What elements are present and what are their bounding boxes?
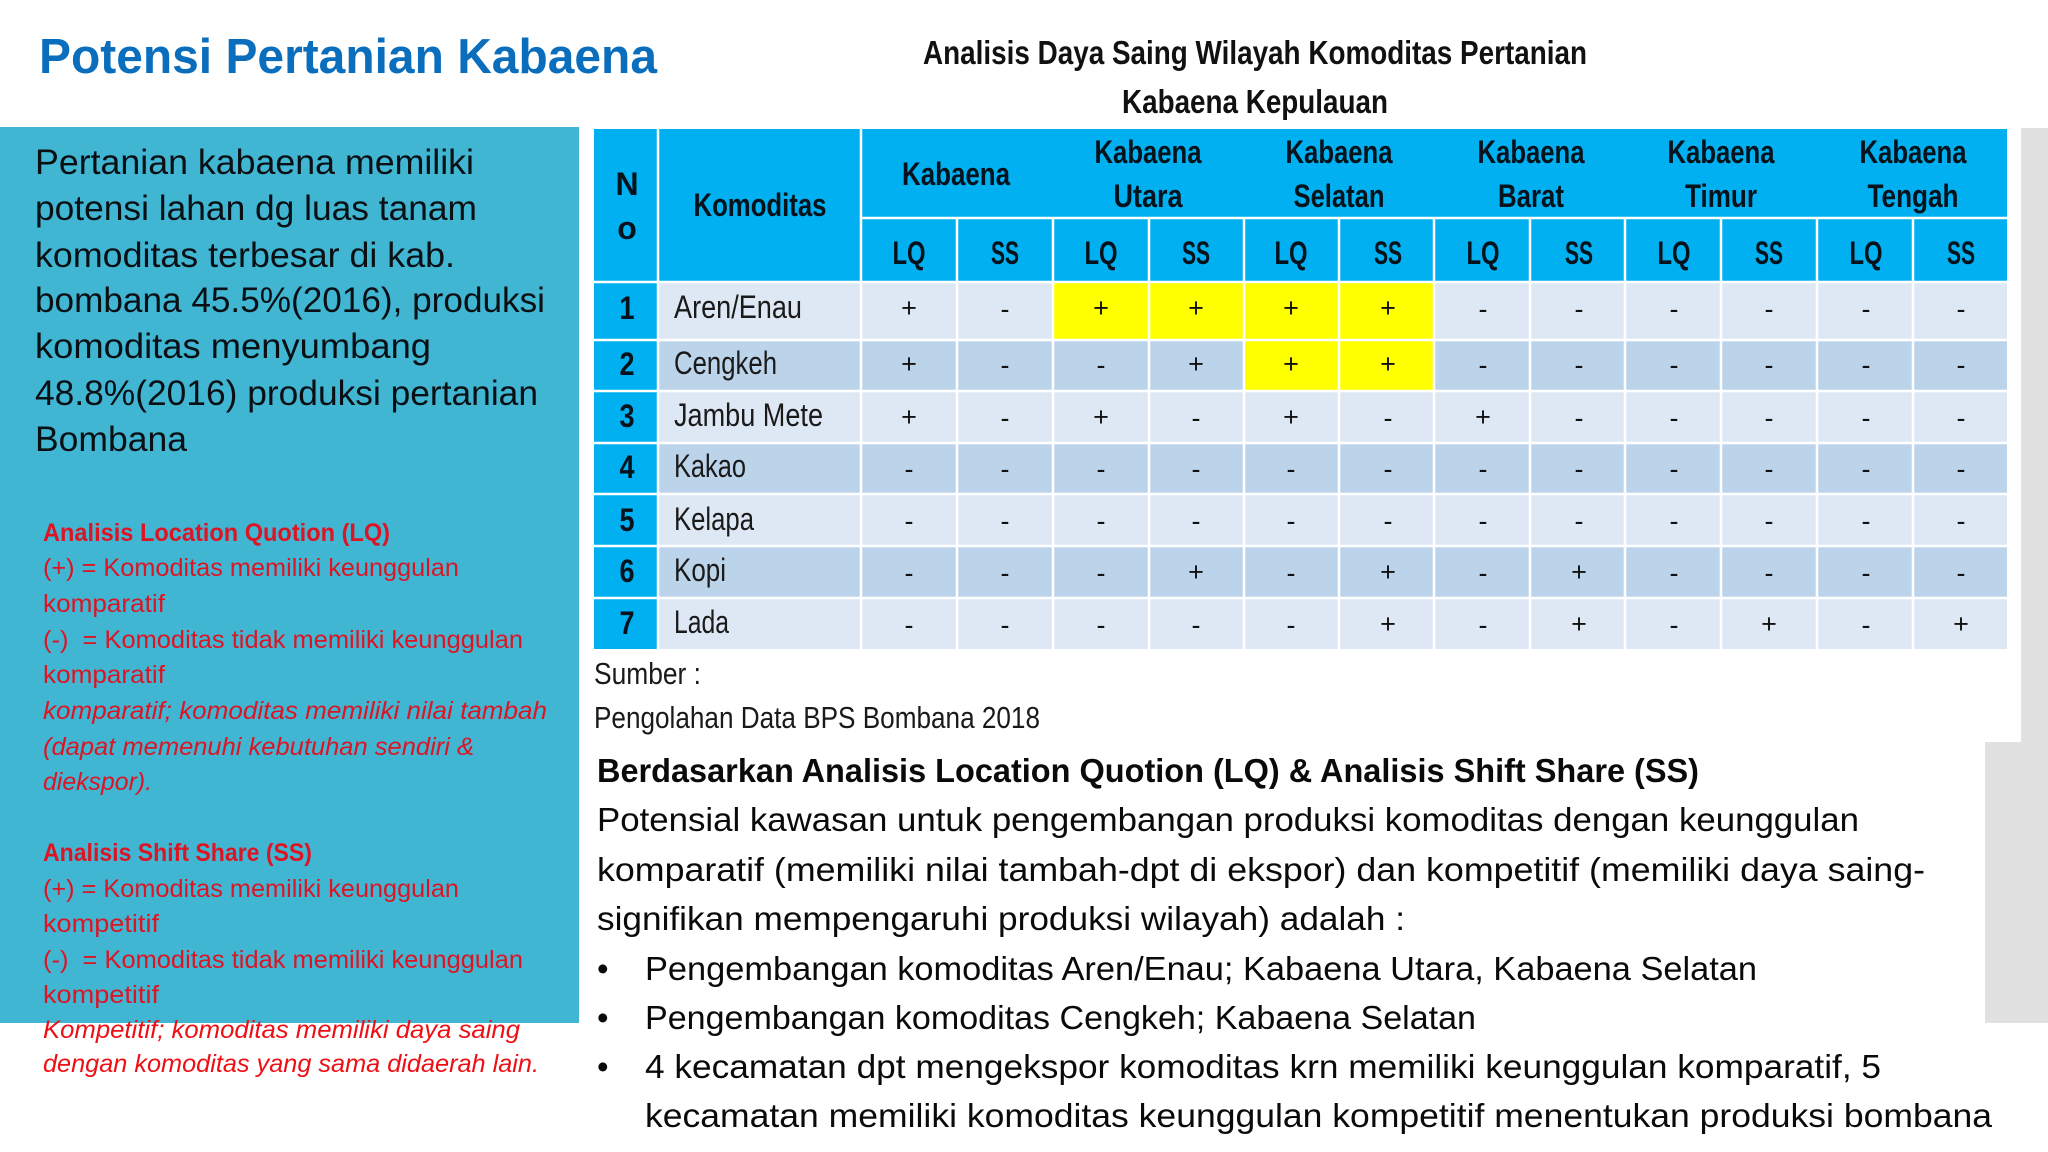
row 4: Kakao: - [1000,454,1010,484]
row 1: Aren/Enau: + [1380,293,1396,323]
row 7: Lada: - [1192,610,1200,640]
row 2: Cengkeh: - [1096,350,1106,380]
row 6: Kopi: - [1670,558,1678,588]
row 2: Cengkeh: + [1283,349,1299,379]
row 7: Lada: - [1478,610,1488,640]
text block: analysis conclusion: komparatif (memiliki nilai tambah-dpt di ekspor) dan kompetitif (memiliki daya saing- [597,851,1925,888]
row 5: Kelapa: - [1574,506,1584,536]
row 2: Cengkeh: 2 [620,346,634,382]
row 6: Kopi [620,552,1966,589]
row 5: Kelapa: - [1096,506,1106,536]
title: Potensi Pertanian Kabaena [39,30,658,84]
row 6: Kopi: 6 [620,553,634,589]
row 2: Cengkeh: + [1188,349,1204,379]
text block: LQ legend: diekspor). [43,768,152,796]
row 1: Aren/Enau: Aren/Enau [674,289,802,325]
source note [594,656,1040,735]
row 3: Jambu Mete: - [1192,403,1200,433]
row 4: Kakao: 4 [620,449,635,485]
text block: analysis conclusion: • [597,1048,609,1085]
text block: analysis conclusion [597,752,1993,1134]
table: competitiveness matrix [594,128,2007,649]
text block: SS legend: (+) = Komoditas memiliki keunggulan [43,875,459,903]
row 1: Aren/Enau [620,289,1966,326]
row 4: Kakao: - [1286,454,1296,484]
text block: potential summary: Bombana [35,420,188,459]
text block: SS legend: kompetitif [43,910,159,938]
row 4: Kakao: - [1478,454,1488,484]
text block: analysis conclusion: 4 kecamatan dpt mengekspor komoditas krn memiliki keunggulan komparatif, 5 [645,1048,1881,1085]
row 1: Aren/Enau: + [1093,293,1109,323]
text block: SS legend: Kompetitif; komoditas memiliki daya saing [43,1016,520,1044]
table header: Kabaena [1094,134,1202,170]
row 1: Aren/Enau: + [1188,293,1204,323]
row 6: Kopi: - [904,558,914,588]
row 6: Kopi: + [1380,557,1396,587]
row 3: Jambu Mete: - [1956,403,1966,433]
text block: analysis conclusion: • [597,999,609,1036]
text block: SS legend: (-) = Komoditas tidak memiliki keunggulan [43,946,523,974]
text block: analysis conclusion: Potensial kawasan untuk pengembangan produksi komoditas dengan keunggulan [597,801,1859,838]
row 4: Kakao: - [1862,454,1870,484]
row 3: Jambu Mete: - [1862,403,1870,433]
row 6: Kopi: - [1000,558,1010,588]
row 5: Kelapa: - [1862,506,1870,536]
row 4: Kakao: - [1670,454,1678,484]
row 6: Kopi: - [1956,558,1966,588]
row 6: Kopi: - [1096,558,1106,588]
table heading: Analisis Daya Saing Wilayah Komoditas Pertanian [923,34,1587,71]
row 3: Jambu Mete: - [1384,403,1392,433]
row 6: Kopi: - [1764,558,1774,588]
row 2: Cengkeh: - [1478,350,1488,380]
row 4: Kakao: - [1574,454,1584,484]
row 3: Jambu Mete: 3 [620,398,634,434]
row 7: Lada: + [1953,609,1969,639]
text block: potential summary [35,143,545,459]
row 7: Lada: - [1670,610,1678,640]
text block: analysis conclusion: Pengembangan komoditas Aren/Enau; Kabaena Utara, Kabaena Selatan [645,950,1757,987]
table header: LQ [1274,235,1308,271]
table header: SS [1182,235,1210,271]
row 2: Cengkeh: - [1956,350,1966,380]
table header: Utara [1114,178,1183,214]
row 7: Lada: + [1380,609,1396,639]
table header: Barat [1498,178,1564,214]
row 1: Aren/Enau: - [1478,294,1488,324]
table header: Tengah [1868,178,1958,214]
table header: Kabaena [1668,134,1775,170]
row 2: Cengkeh: - [1670,350,1678,380]
text block: LQ legend [43,519,547,796]
row 3: Jambu Mete: - [1000,403,1010,433]
text block: analysis conclusion: Berdasarkan Analisis Location Quotion (LQ) & Analisis Shift Share (SS) [597,752,1699,789]
text block: analysis conclusion: signifikan mempengaruhi produksi wilayah) adalah : [597,900,1405,937]
row 5: Kelapa: - [904,506,914,536]
text block: SS legend: Analisis Shift Share (SS) [43,839,312,867]
row 4: Kakao: - [1384,454,1392,484]
table header: LQ [1658,235,1690,271]
row 4: Kakao: - [1096,454,1106,484]
table header: Selatan [1294,178,1384,214]
table header: SS [1947,235,1975,271]
row 1: Aren/Enau: - [1670,294,1678,324]
text block: LQ legend: (+) = Komoditas memiliki keunggulan [43,554,459,582]
row 7: Lada: - [1000,610,1010,640]
table heading: Kabaena Kepulauan [1122,83,1388,120]
row 5: Kelapa: - [1764,506,1774,536]
text block: potential summary: potensi lahan dg luas tanam [35,189,477,228]
table header: SS [1755,235,1783,271]
table heading [923,34,1587,120]
row 2: Cengkeh: - [1574,350,1584,380]
row 5: Kelapa [620,501,1966,538]
text block: potential summary: komoditas menyumbang [35,327,431,366]
row 1: Aren/Enau: - [1000,294,1010,324]
table header: Timur [1685,178,1757,214]
row 5: Kelapa: - [1192,506,1200,536]
table header [615,134,1975,271]
row 6: Kopi: Kopi [674,552,726,588]
table header: o [617,210,637,246]
row 7: Lada: - [1286,610,1296,640]
row 2: Cengkeh: + [901,349,917,379]
row 5: Kelapa: Kelapa [674,501,754,537]
row 2: Cengkeh [620,345,1966,382]
text block: analysis conclusion: kecamatan memiliki komoditas keunggulan kompetitif menentukan produksi bombana [645,1097,1993,1134]
text block: potential summary: Pertanian kabaena memiliki [35,143,474,182]
text block: LQ legend: (-) = Komoditas tidak memiliki keunggulan [43,626,523,654]
panel: left description [0,127,579,1023]
table header: SS [1565,235,1593,271]
row 3: Jambu Mete: - [1764,403,1774,433]
text block: SS legend [43,839,539,1078]
text block: potential summary: bombana 45.5%(2016), produksi [35,281,545,320]
row 3: Jambu Mete: - [1670,403,1678,433]
row 6: Kopi: + [1188,557,1204,587]
row 3: Jambu Mete: + [1283,402,1299,432]
table header: SS [991,235,1019,271]
text block: LQ legend: (dapat memenuhi kebutuhan sendiri & [43,733,474,761]
row 1: Aren/Enau: - [1574,294,1584,324]
text block: potential summary: 48.8%(2016) produksi pertanian [35,374,538,413]
row 1: Aren/Enau: 1 [620,290,634,326]
table header: LQ [1084,235,1118,271]
table header: LQ [892,235,926,271]
row 7: Lada: - [1862,610,1870,640]
table header: SS [1374,235,1402,271]
row 3: Jambu Mete: + [1475,402,1491,432]
row 7: Lada: - [904,610,914,640]
text block: analysis conclusion: • [597,950,609,987]
row 3: Jambu Mete [620,397,1966,434]
text block: analysis conclusion: Pengembangan komoditas Cengkeh; Kabaena Selatan [645,999,1476,1036]
row 6: Kopi: - [1478,558,1488,588]
text block: potential summary: komoditas terbesar di kab. [35,236,455,275]
source note: Sumber : [594,656,701,691]
row 7: Lada [620,604,1969,641]
table header: Kabaena [902,156,1010,192]
row 3: Jambu Mete: + [901,402,917,432]
table header: Kabaena [1478,134,1585,170]
row 7: Lada: 7 [620,605,634,641]
row 5: Kelapa: - [1670,506,1678,536]
table header: Kabaena [1286,134,1393,170]
source note: Pengolahan Data BPS Bombana 2018 [594,700,1040,735]
row 4: Kakao: Kakao [674,448,746,484]
row 2: Cengkeh: - [1862,350,1870,380]
table header: LQ [1850,235,1882,271]
text block: SS legend: kompetitif [43,981,159,1009]
text block: LQ legend: komparatif [43,661,165,689]
row 7: Lada: - [1096,610,1106,640]
row 6: Kopi: + [1571,557,1587,587]
row 4: Kakao: - [1192,454,1200,484]
row 2: Cengkeh: - [1000,350,1010,380]
row 4: Kakao: - [904,454,914,484]
row 5: Kelapa: 5 [620,502,634,538]
row 2: Cengkeh: + [1380,349,1396,379]
row 5: Kelapa: - [1478,506,1488,536]
row 3: Jambu Mete: + [1093,402,1109,432]
row 3: Jambu Mete: Jambu Mete [674,397,823,433]
row 4: Kakao [620,448,1966,485]
table header: N [615,166,639,202]
row 4: Kakao: - [1764,454,1774,484]
row 5: Kelapa: - [1286,506,1296,536]
row 5: Kelapa: - [1384,506,1392,536]
row 1: Aren/Enau: - [1764,294,1774,324]
row 6: Kopi: - [1286,558,1296,588]
row 1: Aren/Enau: - [1956,294,1966,324]
row 1: Aren/Enau: - [1862,294,1870,324]
row 3: Jambu Mete: - [1574,403,1584,433]
text block: SS legend: dengan komoditas yang sama didaerah lain. [43,1050,539,1078]
row 7: Lada: + [1761,609,1777,639]
row 7: Lada: + [1571,609,1587,639]
row 6: Kopi: - [1862,558,1870,588]
text block: LQ legend: komparatif; komoditas memiliki nilai tambah [43,697,547,725]
table header: LQ [1466,235,1500,271]
text block: LQ legend: komparatif [43,590,165,618]
row 2: Cengkeh: - [1764,350,1774,380]
row 7: Lada: Lada [674,604,729,640]
table header: Komoditas [694,187,826,223]
row 2: Cengkeh: Cengkeh [674,345,777,381]
row 5: Kelapa: - [1000,506,1010,536]
row 4: Kakao: - [1956,454,1966,484]
text block: LQ legend: Analisis Location Quotion (LQ) [43,519,390,547]
table header: Kabaena [1860,134,1967,170]
row 1: Aren/Enau: + [901,293,917,323]
row 1: Aren/Enau: + [1283,293,1299,323]
row 5: Kelapa: - [1956,506,1966,536]
